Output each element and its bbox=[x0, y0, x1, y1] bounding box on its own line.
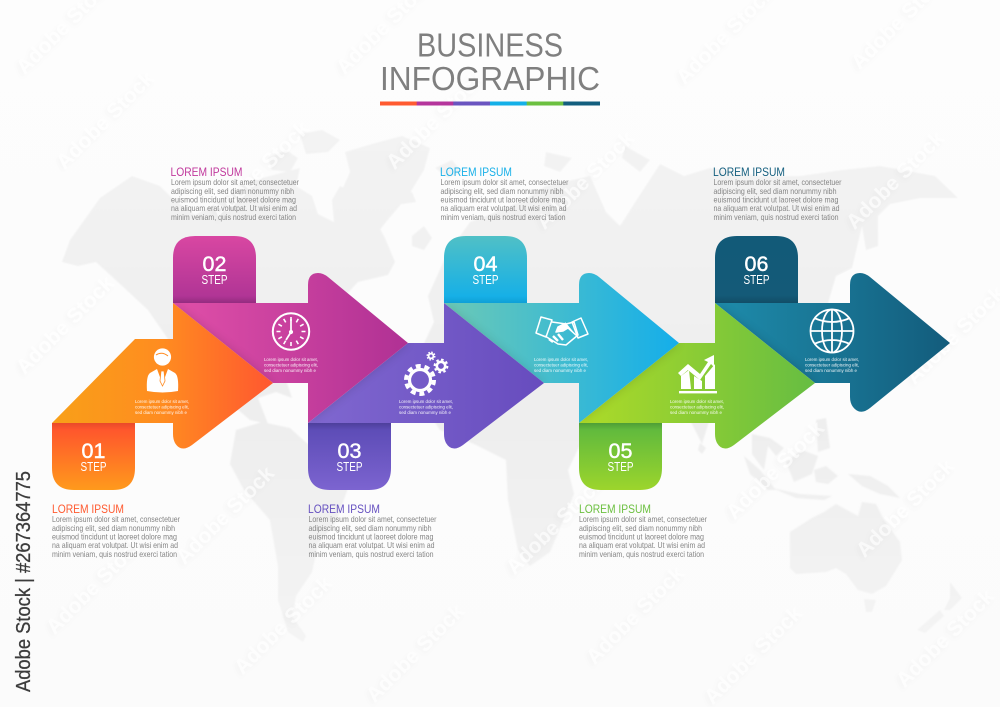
watermarks: Adobe Stock bbox=[42, 532, 149, 639]
text block 05: Lorem ipsum dolor sit amet, consectetuer bbox=[579, 514, 707, 524]
text block 02: LOREM IPSUM bbox=[170, 167, 242, 179]
text block 04: minim veniam, quis nostrud exerci tation bbox=[440, 212, 566, 222]
text block 02 bbox=[170, 167, 299, 222]
watermarks: Adobe Stock bbox=[532, 127, 639, 234]
text block 04 bbox=[440, 167, 569, 222]
step 06 bbox=[715, 236, 950, 412]
arrow 05 text: sed diam nonummy nibh e bbox=[670, 410, 722, 415]
watermarks: Adobe Stock bbox=[230, 572, 337, 679]
tab 02: 02 bbox=[203, 252, 226, 276]
arrow 04 text: Lorem ipsum dolor sit amet, bbox=[534, 357, 588, 362]
arrow 05 text: Lorem ipsum dolor sit amet, bbox=[670, 399, 724, 404]
arrow 06 text bbox=[805, 357, 859, 373]
icon: clock bbox=[273, 313, 309, 350]
arrow 05 text bbox=[670, 399, 724, 415]
world map bbox=[62, 130, 962, 642]
watermarks: Adobe Stock bbox=[842, 127, 949, 234]
watermarks: Adobe Stock bbox=[502, 472, 609, 579]
arrow 02 text: consectetuer adipiscing elit, bbox=[264, 362, 318, 368]
text block 06: minim veniam, quis nostrud exerci tation bbox=[714, 212, 839, 222]
watermarks: Adobe Stock bbox=[12, 272, 119, 379]
text block 01: LOREM IPSUM bbox=[52, 504, 124, 516]
text block 01: adipiscing elit, sed diam nonummy nibh bbox=[52, 523, 175, 533]
tab 03: STEP bbox=[336, 460, 362, 474]
tab 04 bbox=[444, 236, 527, 303]
text block 05: LOREM IPSUM bbox=[579, 504, 651, 516]
text block 04: LOREM IPSUM bbox=[440, 167, 512, 179]
text block 04: euismod tincidunt ut laoreet dolore mag bbox=[440, 194, 566, 204]
tab 05: STEP bbox=[608, 460, 634, 474]
text block 06: na aliquam erat volutpat. Ut wisi enim ad bbox=[714, 203, 840, 213]
text block 05: na aliquam erat volutpat. Ut wisi enim ad bbox=[579, 540, 705, 550]
text block 03: na aliquam erat volutpat. Ut wisi enim ad bbox=[308, 540, 435, 550]
watermarks: Adobe Stock bbox=[172, 462, 279, 569]
watermarks: Adobe Stock bbox=[582, 562, 689, 669]
arrow 01 text: consectetuer adipiscing elit, bbox=[135, 404, 189, 410]
tab 06: STEP bbox=[744, 273, 770, 287]
text block 06: euismod tincidunt ut laoreet dolore mag bbox=[714, 194, 839, 204]
watermarks: Adobe Stock bbox=[207, 117, 314, 224]
text block 03: minim veniam, quis nostrud exerci tation bbox=[308, 549, 434, 559]
arrow 01 text bbox=[135, 399, 189, 415]
step 01 bbox=[52, 303, 273, 490]
arrow 01 bbox=[52, 303, 273, 449]
text block 01 bbox=[52, 504, 180, 559]
arrow 03 text: Lorem ipsum dolor sit amet, bbox=[399, 399, 453, 404]
title: BUSINESS bbox=[417, 26, 563, 64]
arrow 06 bbox=[715, 273, 950, 412]
tab 01: STEP bbox=[80, 460, 106, 474]
text block 02: adipiscing elit, sed diam nonummy nibh bbox=[171, 186, 294, 196]
icon: globe bbox=[810, 310, 854, 352]
text block 02: minim veniam, quis nostrud exerci tation bbox=[171, 212, 296, 222]
tab 03: 03 bbox=[338, 439, 361, 463]
side stock id: Adobe Stock | #267364775 bbox=[13, 471, 35, 692]
tab 04: 04 bbox=[474, 252, 497, 276]
arrow 04 text bbox=[534, 357, 588, 373]
arrow 02 text bbox=[264, 357, 318, 373]
tab 05: 05 bbox=[609, 439, 632, 463]
step 02 bbox=[173, 236, 408, 423]
tab 06: 06 bbox=[745, 252, 768, 276]
arrow 01 text: sed diam nonummy nibh e bbox=[135, 410, 187, 415]
text block 03 bbox=[308, 504, 437, 559]
text block 02: Lorem ipsum dolor sit amet, consectetuer bbox=[171, 177, 299, 187]
text block 01: minim veniam, quis nostrud exerci tation bbox=[52, 549, 177, 559]
arrow 03 bbox=[308, 303, 544, 449]
text block 02: na aliquam erat volutpat. Ut wisi enim ad bbox=[171, 203, 297, 213]
tab 03 bbox=[308, 423, 391, 490]
step 03 bbox=[308, 303, 544, 490]
text block 06: Lorem ipsum dolor sit amet, consectetuer bbox=[714, 177, 842, 187]
watermarks: Adobe Stock bbox=[722, 417, 829, 524]
text block 05: adipiscing elit, sed diam nonummy nibh bbox=[579, 523, 702, 533]
step 04 bbox=[444, 236, 679, 423]
text block 05: euismod tincidunt ut laoreet dolore mag bbox=[579, 532, 704, 542]
icon: businessman bbox=[147, 348, 178, 392]
tab 06 bbox=[715, 236, 798, 303]
arrow 05 text: consectetuer adipiscing elit, bbox=[670, 404, 724, 410]
text block 06 bbox=[713, 167, 842, 222]
arrow 02 text: Lorem ipsum dolor sit amet, bbox=[264, 357, 318, 362]
title: INFOGRAPHIC bbox=[380, 60, 600, 97]
icon: growth chart bbox=[678, 355, 717, 393]
watermarks: Adobe Stock bbox=[52, 67, 159, 174]
arrow 03 text: consectetuer adipiscing elit, bbox=[399, 404, 453, 410]
arrow 02 text: sed diam nonummy nibh e bbox=[264, 368, 316, 373]
tab 05 bbox=[579, 423, 662, 490]
arrow 03 text bbox=[399, 399, 453, 415]
arrow 05 bbox=[579, 303, 815, 449]
tab 02 bbox=[173, 236, 256, 303]
arrow 03 text: sed diam nonummy nibh e bbox=[399, 410, 451, 415]
watermarks: Adobe Stock bbox=[382, 67, 489, 174]
text block 03: Lorem ipsum dolor sit amet, consectetuer bbox=[308, 514, 437, 524]
fold shadows bbox=[176, 305, 813, 421]
text block 01: euismod tincidunt ut laoreet dolore mag bbox=[52, 532, 177, 542]
text block 03: euismod tincidunt ut laoreet dolore mag bbox=[308, 532, 434, 542]
arrow 06 text: Lorem ipsum dolor sit amet, bbox=[805, 357, 859, 362]
tab 02: STEP bbox=[202, 273, 228, 287]
arrow 01 text: Lorem ipsum dolor sit amet, bbox=[135, 399, 189, 404]
text block 04: adipiscing elit, sed diam nonummy nibh bbox=[440, 186, 564, 196]
icon: handshake bbox=[536, 317, 588, 345]
arrow 04 bbox=[444, 273, 679, 423]
text block 04: Lorem ipsum dolor sit amet, consectetuer bbox=[440, 177, 569, 187]
watermarks: Adobe Stock bbox=[700, 602, 807, 707]
arrow 04 text: sed diam nonummy nibh e bbox=[534, 368, 586, 373]
arrow 04 text: consectetuer adipiscing elit, bbox=[534, 362, 588, 368]
text block 03: LOREM IPSUM bbox=[308, 504, 380, 516]
watermarks: Adobe Stock bbox=[892, 585, 999, 692]
text block 06: LOREM IPSUM bbox=[713, 167, 785, 179]
watermarks: Adobe Stock bbox=[852, 455, 959, 562]
arrow 02 bbox=[173, 273, 408, 423]
text block 01: Lorem ipsum dolor sit amet, consectetuer bbox=[52, 514, 180, 524]
arrow 06 text: sed diam nonummy nibh e bbox=[805, 368, 857, 373]
icon: gears bbox=[406, 352, 447, 394]
title bbox=[380, 26, 600, 97]
text block 02: euismod tincidunt ut laoreet dolore mag bbox=[171, 194, 296, 204]
title colour bar bbox=[380, 102, 600, 106]
tab 04: STEP bbox=[472, 273, 498, 287]
step 05 bbox=[579, 303, 815, 490]
watermarks: Adobe Stock bbox=[362, 600, 469, 707]
tab 01: 01 bbox=[82, 439, 105, 463]
text block 06: adipiscing elit, sed diam nonummy nibh bbox=[714, 186, 837, 196]
text block 01: na aliquam erat volutpat. Ut wisi enim ad bbox=[52, 540, 178, 550]
text block 03: adipiscing elit, sed diam nonummy nibh bbox=[308, 523, 432, 533]
arrow 06 text: consectetuer adipiscing elit, bbox=[805, 362, 859, 368]
text block 05: minim veniam, quis nostrud exerci tation bbox=[579, 549, 704, 559]
tab 01 bbox=[52, 423, 135, 490]
text block 04: na aliquam erat volutpat. Ut wisi enim ad bbox=[440, 203, 567, 213]
text block 05 bbox=[579, 504, 707, 559]
